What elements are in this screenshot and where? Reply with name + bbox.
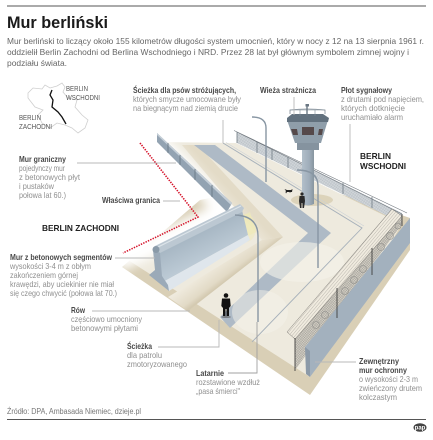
intro text: oddzielił Berlin Zachodni od Berlina Wschodniego i NRD. Przez 28 lat był głównym symbolem zimnej wojny i [7, 47, 409, 57]
label: street lamps: „pasa śmierci" [196, 387, 240, 396]
heading: Berlin Wschodni: WSCHODNI [360, 161, 406, 171]
light pools [260, 242, 344, 282]
ditch upper arm [182, 145, 283, 240]
label: street lamps: rozstawione wzdłuż [196, 378, 260, 387]
locator map of Berlin: WSCHODNI [66, 95, 100, 102]
label: outer wall: mur ochronny [359, 366, 407, 375]
PAP logo: pap [415, 426, 426, 432]
intro text: podziału świata. [7, 58, 67, 68]
label: dog path: których smycze umocowane były [133, 95, 242, 104]
label: signal fence: Płot sygnałowy [341, 86, 392, 95]
label: outer wall: kolczastym [359, 393, 397, 402]
label: outer wall [315, 357, 422, 402]
label: border wall: pojedynczy mur [19, 164, 65, 173]
title: Mur berliński [7, 13, 108, 32]
label: street lamps [196, 322, 260, 396]
locator map of Berlin: BERLIN [66, 86, 88, 93]
label: patrol path: dla patrolu [127, 351, 162, 360]
label: concrete segment wall [9, 253, 155, 298]
bottom rule [7, 419, 426, 420]
label: signal fence: z drutami pod napięciem, [341, 95, 424, 104]
label: border wall: połowa lat 60.) [19, 191, 66, 200]
source: Źródło: DPA, Ambasada Niemiec, dzieje.pl [7, 407, 141, 416]
intro text: Mur berliński to liczący około 155 kilometrów długości system umocnień, który w nocy z 12 na 13 sierpnia 1961 r. [7, 36, 424, 46]
3D illustration of the border strip [118, 130, 410, 395]
locator map of Berlin [19, 83, 100, 133]
ditch lower arm [168, 237, 283, 311]
locator map of Berlin: BERLIN [19, 115, 41, 122]
true border dotted line [123, 143, 198, 253]
label: watchtower [260, 86, 316, 115]
ground top surface [125, 142, 402, 377]
top rule [7, 6, 426, 7]
lamp posts [235, 117, 318, 322]
label: patrol path: Ścieżka [127, 340, 152, 351]
label: dog path: Ścieżka dla psów stróżujących, [133, 84, 236, 95]
label: ditch: Rów [71, 306, 85, 315]
ground base [122, 180, 410, 395]
watchtower [287, 104, 329, 206]
fence overhang [287, 209, 402, 339]
inner border wall [157, 133, 232, 212]
patrol road [194, 145, 331, 328]
label: watchtower: Wieża strażnicza [260, 86, 316, 95]
label: concrete segment wall: krawędzi, aby uciekinier nie miał [10, 280, 114, 289]
label: signal fence: których dotknięcie [341, 104, 405, 113]
label: concrete segment wall: wysokości 3-4 m z obłym [9, 262, 91, 271]
label: ditch: częściowo umocniony [71, 315, 143, 324]
heading: Berlin Wschodni: BERLIN [360, 151, 391, 161]
label: outer wall: zwieńczony drutem [359, 384, 422, 393]
label: street lamps: Latarnie [196, 369, 224, 378]
label: ditch: betonowymi płytami [71, 324, 138, 333]
fence posts [295, 214, 402, 371]
label: signal fence [341, 86, 424, 182]
guard dog [284, 189, 292, 194]
PAP logo [414, 423, 426, 432]
guard with tower [299, 192, 305, 208]
label: dog path: na biegnącym nad ziemią drucie [133, 104, 238, 113]
intro text [7, 36, 424, 68]
label: concrete segment wall: zakończeniem górnej [10, 271, 78, 280]
label: outer wall: Zewnętrzny [359, 357, 399, 366]
label: patrol path [127, 320, 219, 369]
label: dog path [133, 84, 242, 143]
yellow lamp glow [238, 212, 256, 238]
label: actual border: Właściwa granica [102, 196, 160, 205]
label: signal fence: uruchamiało alarm [341, 113, 403, 122]
locator map of Berlin: ZACHODNI [19, 124, 52, 131]
label: border wall: i pustaków [19, 182, 54, 191]
heading: Berlin Wschodni [360, 151, 406, 171]
label: border wall [19, 155, 176, 200]
tower shadow [291, 194, 333, 206]
signal fence rail [223, 143, 362, 342]
concrete segment wall [149, 204, 250, 291]
label: outer wall: o wysokości 2-3 m [359, 375, 418, 384]
guard on patrol road [221, 293, 231, 318]
label: concrete segment wall: Mur z betonowych segmentów [10, 253, 113, 262]
outer protection wall [295, 216, 402, 370]
label: ditch [71, 306, 190, 333]
label: border wall: Mur graniczny [19, 155, 66, 164]
heading: Berlin Zachodni: BERLIN ZACHODNI [42, 223, 119, 233]
label: concrete segment wall: się czego chwycić (połowa lat 70.) [10, 289, 117, 298]
label: patrol path: zmotoryzowanego [127, 360, 187, 369]
razor wire [312, 223, 401, 328]
white fade along the inner wall [118, 136, 226, 262]
label: border wall: z betonowych płyt [19, 173, 81, 182]
east mesh fence [234, 130, 407, 223]
